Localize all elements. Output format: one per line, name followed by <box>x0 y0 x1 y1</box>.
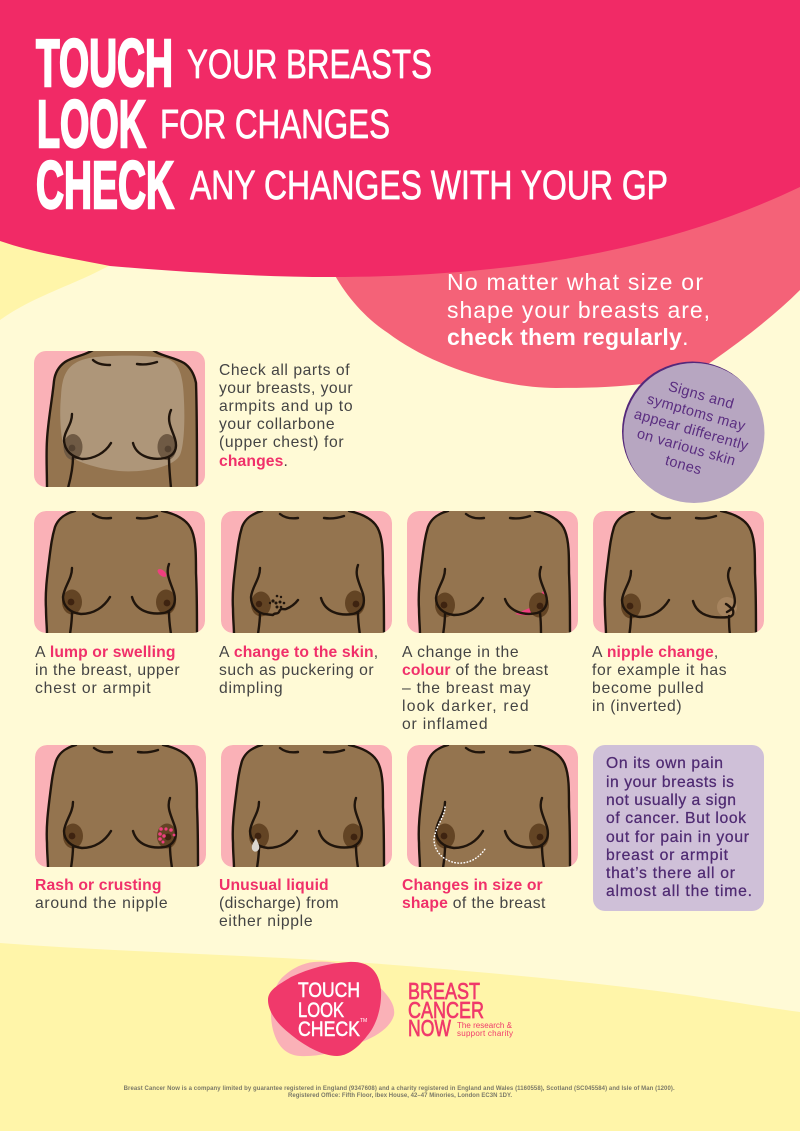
legal text: Registered Office: Fifth Floor, Ibex House, 42–47 Minories, London EC3N 1DY. <box>288 1093 512 1099</box>
caption: lump: chest or armpit <box>35 680 151 697</box>
callout: pain <box>593 745 764 911</box>
callout: skin tones: on various skin <box>635 426 737 469</box>
icon: lump <box>158 569 166 577</box>
caption: size: shape <box>402 895 448 912</box>
panel: skin change <box>221 509 392 635</box>
title: ANY CHANGES WITH YOUR GP <box>190 162 668 208</box>
callout: skin tones <box>622 362 764 503</box>
logo: touch look check <box>268 962 394 1056</box>
caption: lump: A <box>35 644 50 661</box>
caption: nipple: in (inverted) <box>592 698 682 715</box>
callout: pain: that’s there all or <box>606 865 735 882</box>
caption: colour: A change in the <box>402 644 519 661</box>
callout: pain: not usually a sign <box>606 792 736 809</box>
caption: colour: look darker, red <box>402 698 529 715</box>
callout: pain: breast or armpit <box>606 847 729 864</box>
legal text: Breast Cancer Now is a company limited by guarantee registered in England (9347608) and a charity registered in England and Wales (1160558), Scotland (SC045584) and Isle of Man (1200). <box>124 1086 675 1092</box>
panel: size or shape <box>407 743 578 869</box>
caption: liquid: Unusual liquid <box>219 877 329 894</box>
icon: puckering dots <box>269 595 285 608</box>
logo: touch look check: CHECK <box>298 1018 360 1041</box>
caption: skin: dimpling <box>219 680 283 697</box>
intro text: No matter what size or <box>447 269 703 295</box>
caption: colour: – the breast may <box>402 680 531 697</box>
caption: skin: such as puckering or <box>219 662 374 679</box>
text: check all parts: Check all parts of <box>219 362 350 379</box>
callout: pain: almost all the time. <box>606 883 752 900</box>
caption: rash: around the nipple <box>35 895 168 912</box>
panel: lump or swelling <box>34 509 205 635</box>
text: check all parts: armpits and up to <box>219 398 353 415</box>
text: check all parts: your collarbone <box>219 416 335 433</box>
intro text: check them regularly. <box>447 324 689 350</box>
text: check all parts: your breasts, your <box>219 380 353 397</box>
caption: skin: change to the skin, <box>234 644 379 661</box>
caption: nipple: become pulled <box>592 680 704 697</box>
caption: size: of the breast <box>448 895 546 912</box>
caption: colour: or inflamed <box>402 716 488 733</box>
icon: redness <box>515 591 548 615</box>
coral curved shape <box>332 170 800 388</box>
text: check all parts: (upper chest) for <box>219 434 344 451</box>
callout: skin tones: appear differently <box>632 406 751 455</box>
caption: liquid: either nipple <box>219 913 313 930</box>
title: LOOK <box>37 87 146 162</box>
logo: touch look check: TM <box>360 1018 367 1024</box>
panel: rash or crusting <box>35 743 206 869</box>
yellow corner shape <box>0 230 112 320</box>
caption: nipple: for example it has <box>592 662 727 679</box>
caption: colour: colour <box>402 662 451 679</box>
icon: discharge drop <box>252 838 259 852</box>
logo: breast cancer now <box>408 978 513 1041</box>
logo: breast cancer now: support charity <box>457 1029 513 1038</box>
title: YOUR BREASTS <box>187 41 432 87</box>
caption: size: Changes in size or <box>402 877 543 894</box>
header banner <box>0 0 800 277</box>
callout: skin tones: symptoms may <box>645 391 748 435</box>
caption: nipple: A <box>592 644 607 661</box>
title: TOUCH <box>36 26 173 101</box>
caption: lump: lump or swelling <box>50 644 176 661</box>
logo: breast cancer now: The research & <box>457 1021 513 1030</box>
icon: inverted nipple <box>717 597 737 617</box>
caption: colour: of the breast <box>451 662 549 679</box>
logo: touch look check: LOOK <box>298 999 344 1022</box>
callout: pain: On its own pain <box>606 755 723 772</box>
callout: pain: in your breasts is <box>606 774 734 791</box>
panel: colour change <box>407 509 578 635</box>
text: check all parts: . <box>284 453 288 470</box>
logo: breast cancer now: CANCER <box>408 997 484 1023</box>
title <box>36 26 668 223</box>
logo: breast cancer now: NOW <box>408 1015 451 1041</box>
caption: nipple: nipple change, <box>607 644 719 661</box>
icon: rash dots <box>158 827 175 844</box>
callout: pain: of cancer. But look <box>606 810 746 827</box>
title: CHECK <box>36 148 174 223</box>
panel: overview illustration <box>34 349 205 489</box>
intro text: shape your breasts are, <box>447 297 710 323</box>
examined area <box>60 356 184 471</box>
caption: liquid: (discharge) from <box>219 895 339 912</box>
title: FOR CHANGES <box>160 101 390 147</box>
logo: touch look check: TOUCH <box>298 979 360 1002</box>
panel: nipple change <box>593 509 764 637</box>
icon: dotted outline <box>434 807 485 863</box>
text: check all parts: changes <box>219 453 284 470</box>
caption: rash: Rash or crusting <box>35 877 162 894</box>
callout: pain: out for pain in your <box>606 829 749 846</box>
footer band <box>0 943 800 1131</box>
callout: skin tones: tones <box>663 453 703 478</box>
panel: unusual liquid <box>221 743 392 869</box>
logo: breast cancer now: BREAST <box>408 978 480 1004</box>
caption: lump: in the breast, upper <box>35 662 180 679</box>
caption: skin: A <box>219 644 234 661</box>
callout: skin tones: Signs and <box>666 379 736 413</box>
